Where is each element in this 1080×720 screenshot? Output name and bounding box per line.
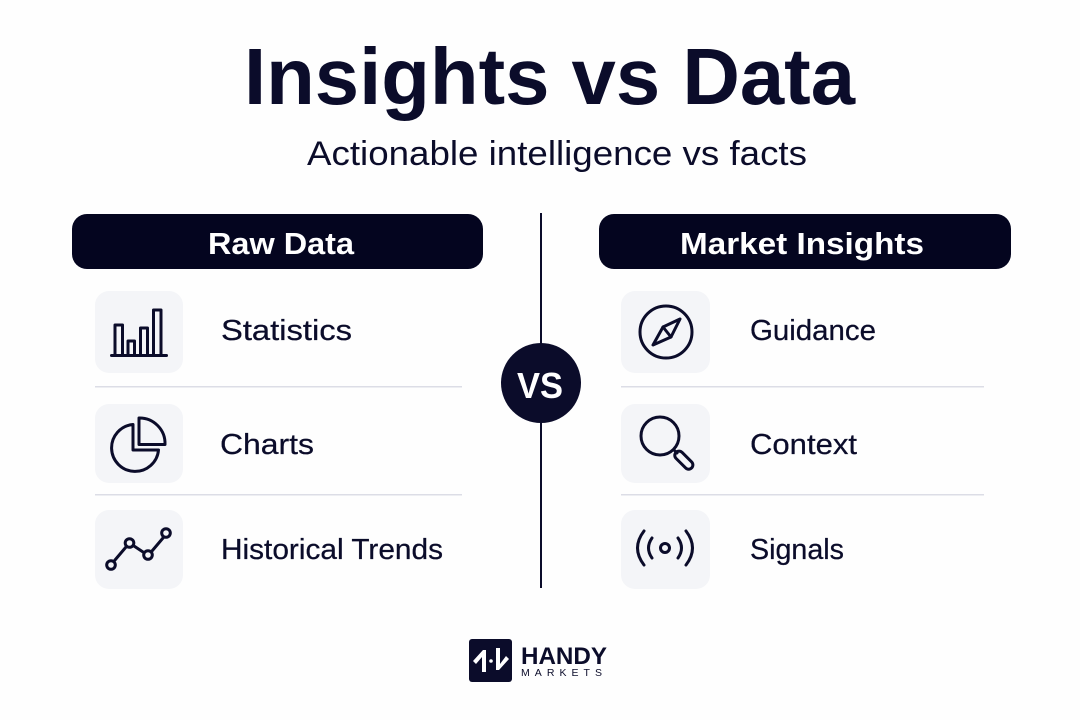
row: guidance <box>621 291 876 373</box>
row: statistics <box>95 291 352 373</box>
subtitle: Actionable intelligence vs facts <box>307 135 807 173</box>
logo wordmark: HANDY <box>521 643 607 670</box>
raw data heading: Raw Data <box>208 226 355 261</box>
row: guidance: Guidance <box>750 315 876 347</box>
vs badge: VS <box>517 365 563 406</box>
row: historical trends: Historical Trends <box>221 534 443 566</box>
logo mark <box>469 639 512 682</box>
row: statistics: Statistics <box>221 315 352 347</box>
icon: pie chart <box>112 418 165 471</box>
market insights heading: Market Insights <box>680 226 924 261</box>
row: historical trends <box>95 510 443 589</box>
icon: signal waves <box>638 531 692 565</box>
panel: raw data <box>72 214 483 589</box>
icon: compass <box>640 306 692 358</box>
logo <box>469 639 607 682</box>
row: charts <box>95 404 314 483</box>
row: signals <box>621 510 844 589</box>
row: signals: Signals <box>750 534 844 566</box>
icon: line trend <box>107 529 170 569</box>
icon: bar chart <box>112 310 166 356</box>
row: charts: Charts <box>220 429 314 461</box>
icon: magnifier <box>641 417 695 471</box>
centre divider line <box>540 213 542 588</box>
vs badge <box>501 343 581 423</box>
market insights heading <box>599 214 1011 269</box>
logo wordmark: MARKETS <box>521 667 602 679</box>
row: context <box>621 404 857 483</box>
title: Insights vs Data <box>244 32 856 121</box>
panel: market insights <box>599 214 1011 589</box>
row: context: Context <box>750 429 857 461</box>
raw data heading <box>72 214 483 269</box>
